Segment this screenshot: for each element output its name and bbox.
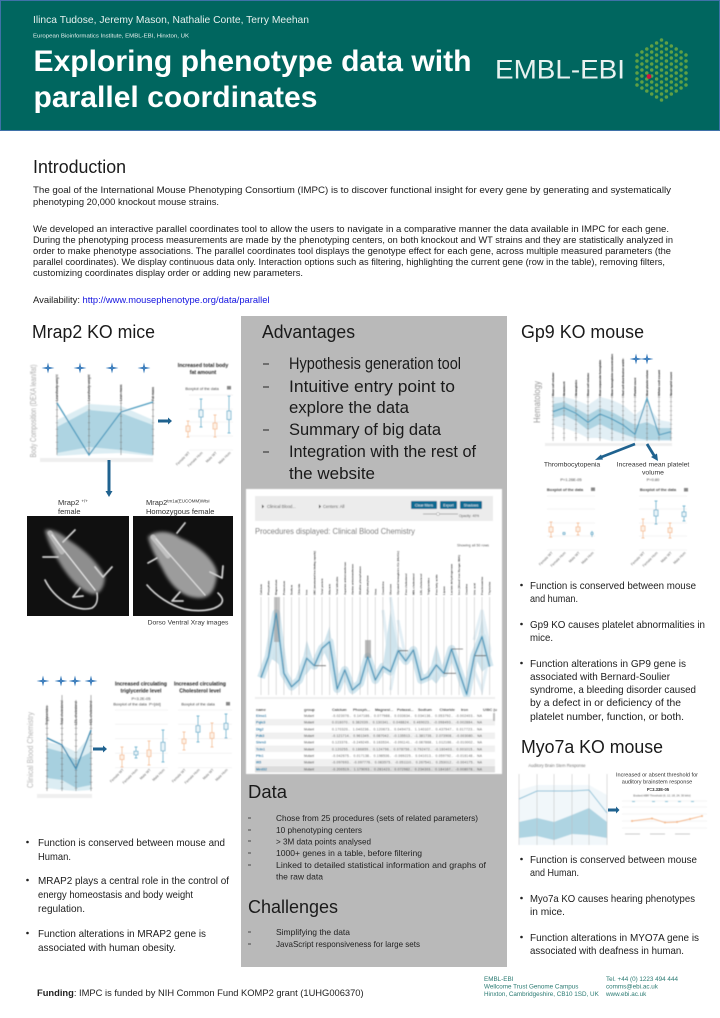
- data table: Pdk3: [256, 734, 264, 738]
- parallel coordinates plot: Aspartate aminotransferase: [343, 562, 347, 595]
- data table: Potassi...: [397, 708, 414, 712]
- contact: phone and web: [605, 976, 678, 998]
- text block: Myo7a findings: Function is conserved between mouse: [530, 854, 697, 866]
- data table: Shrn3: [256, 741, 266, 745]
- panel: advantages and data: [241, 316, 507, 967]
- boxplot: platelet count: Boxplot of the data: [547, 487, 584, 492]
- text block: tool description: We developed an interactive parallel coordinates tool to allow the users to navigate in a comparative manner the data available in IMPC for each gene.: [33, 224, 669, 234]
- contact: address: Hinxton, Cambridgeshire, CB10 1SD, UK: [484, 991, 600, 998]
- parallel coordinates plot: Thyroxine: [488, 581, 492, 595]
- heading: Mrap2: Mrap2 KO mice: [32, 322, 155, 342]
- text block: Mrap2 findings: regulation.: [38, 903, 85, 915]
- text block: Myo7a findings: Myo7a KO causes hearing phenotypes: [530, 893, 695, 905]
- title: [34, 45, 472, 114]
- boxplot: body fat: Male WT: [205, 450, 218, 464]
- title: parallel coordinates: [34, 81, 318, 114]
- text block: Gp9 findings: syndrome, a bleeding disorder caused: [530, 684, 696, 696]
- parallel coordinates plot: Magnesium: [274, 579, 278, 595]
- boxplot: platelet volume: Boxplot of the data: [640, 487, 677, 492]
- text block: goal: The goal of the International Mouse Phenotyping Consortium (IMPC) is to discover functional insight for every gene by generating and systematically: [33, 185, 672, 195]
- chart: body composition parallel coordinates: Body Composition (DEXA lean/fat): [29, 364, 38, 458]
- text block: Gp9 findings: [520, 580, 705, 723]
- parallel coordinates plot: Iron: [305, 589, 309, 595]
- parallel coordinates plot: Glucose: [388, 584, 392, 595]
- label: wild type mouse: [58, 498, 88, 516]
- authors: Ilinca Tudose, Jeremy Mason, Nathalie Conte, Terry Meehan: [33, 15, 309, 26]
- data table: Magnesi...: [375, 708, 393, 712]
- data table: Mutant: [304, 767, 314, 771]
- data table: Sodium: [418, 708, 433, 712]
- parallel coordinates plot: Creatinine: [381, 581, 385, 595]
- boxplot: cholesterol: Male WT: [202, 767, 215, 781]
- parallel coordinates plot: Creatine: [465, 583, 469, 595]
- chart: auditory brain stem response: Auditory Brain Stem Response: [528, 763, 586, 768]
- parallel coordinates plot: Total protein: [320, 578, 324, 595]
- data table: 0.170320.. 1.040236.. 0.120673.. 0.049473.. 1.140107.. 0.437947.. 0.017723.. NA: [332, 727, 483, 731]
- header banner: [0, 0, 720, 130]
- parallel coordinates plot: Lipase: [442, 586, 446, 595]
- boxplot: cholesterol: Female WT: [171, 767, 187, 784]
- boxplot: platelet volume: P=0.80: [647, 477, 660, 482]
- text block: goal: [33, 185, 672, 207]
- list: data: the raw data: [276, 872, 323, 882]
- boxplot: triglyceride: Female WT: [109, 767, 125, 784]
- contact: address: Wellcome Trust Genome Campus: [484, 984, 578, 990]
- heading: introduction: Introduction: [33, 157, 126, 177]
- text: threshold heading: P=3.33E-05: [647, 787, 670, 792]
- text block: Myo7a findings: in mice.: [530, 906, 565, 918]
- parallel coordinates plot: HDL-cholesterol: [411, 573, 415, 595]
- image: xray wild type: [27, 516, 129, 616]
- chart title: Procedures displayed: Clinical Blood Chemistry: [255, 527, 415, 536]
- label: knockout mouse: tm1a(EUCOMM)Wtsi: [167, 498, 210, 504]
- boxplot: body fat: [175, 363, 233, 468]
- chart: hematology parallel coordinates: [532, 354, 673, 446]
- caption: xray: Dorso Ventral Xray images: [148, 620, 229, 626]
- control bar: Opacity: 40%: [459, 514, 479, 518]
- arrow head: platelet volume: [651, 454, 658, 461]
- boxplot: triglyceride: Boxplot of the data P=[dd]: [113, 702, 161, 706]
- chart: clinical blood chemistry parallel coordinates: LDL-cholesterol: [74, 701, 78, 725]
- contact: phone and web: Tel. +44 (0) 1223 494 444: [606, 976, 678, 983]
- chart: body composition parallel coordinates: Fat mass: [151, 387, 155, 401]
- chart: clinical blood chemistry parallel coordinates: Clinical Blood Chemistry: [25, 711, 35, 788]
- list: data: > 3M data points analysed: [276, 836, 371, 846]
- label: increased mean platelet volume: [617, 462, 689, 476]
- parallel coordinates plot: UIBC (unsaturated iron binding capacity): [312, 551, 316, 595]
- data table: Mutant: [304, 734, 314, 738]
- control bar: [255, 496, 493, 521]
- introduction section: [33, 157, 673, 305]
- boxplot: body fat: fat amount: [190, 370, 217, 376]
- text block: Gp9 findings: associated with Bernard-Soulier: [530, 671, 670, 683]
- text block: Gp9 findings: Function alterations in GP9 gene is: [530, 658, 686, 670]
- parallel coordinates plot: Potassium: [282, 580, 286, 595]
- panel: Myo7a KO mouse: [519, 737, 707, 957]
- data table: 0.123376.. -0.249249.. 0.163534.. -0.091141.. -0.087868.. 1.012166.. -0.010002.. NA: [332, 741, 483, 745]
- data table: Dlg2: [256, 727, 264, 731]
- control bar: Clinical Blood...: [267, 504, 296, 509]
- arrow: to boxplot: [158, 418, 172, 424]
- boxplot: cholesterol: [171, 682, 232, 785]
- data table: Calcium: [332, 708, 347, 712]
- parallel coordinates plot: Iron (Blood iron Range: IBIA): [457, 555, 461, 595]
- data table: Mutant: [304, 741, 314, 745]
- data table: Mutant: [304, 727, 314, 731]
- text block: Mrap2 findings: Function alterations in MRAP2 gene is: [38, 928, 206, 940]
- chart: clinical blood chemistry parallel coordinates: Total cholesterol: [60, 700, 64, 725]
- arrow: to platelet volume: [647, 444, 655, 457]
- line chart: threshold: Evoked ABR Threshold (6, 12, 18, 24, 30 kHz): [633, 794, 691, 798]
- label: knockout mouse: [146, 498, 214, 516]
- data table: Pfn1: [256, 754, 264, 758]
- availability link: http://www.mousephenotype.org/data/parallel: [82, 295, 270, 305]
- data table: Chloride: [440, 708, 455, 712]
- contact: phone and web: www.ebi.ac.uk: [605, 991, 647, 998]
- text block: Gp9 findings: Gp9 KO causes platelet abnormalities in: [530, 619, 705, 631]
- boxplot: triglyceride: P=3.2E-05: [131, 696, 151, 701]
- chart: body composition parallel coordinates: [29, 364, 155, 462]
- data table: -0.200519.. 1.179093.. 0.281423.. 0.072982.. 0.234303.. 0.184167.. -0.008078.. NA: [332, 767, 483, 771]
- parallel coordinates plot: Glycated hemoglobin A1c (HbA1c): [396, 551, 400, 595]
- boxplot: platelet count: P=1.26E-05: [560, 477, 582, 482]
- boxplot: platelet volume: Female WT: [630, 550, 646, 567]
- chart: hematology parallel coordinates: Mean platelet volume: [645, 370, 649, 396]
- text block: tool description: parallel coordinates). We display continuous data only. Interaction options such as filtering, highlighting the current gene (row in the table), removing filters,: [33, 257, 665, 267]
- chart: clinical blood chemistry parallel coordinates: HDL-cholesterol: [89, 700, 93, 725]
- label: knockout mouse: Homozygous female: [146, 507, 214, 516]
- text block: goal: phenotyping 20,000 knockout mouse strains.: [33, 197, 219, 207]
- list: advantages: explore the data: [289, 399, 410, 417]
- data table: -0.121714.. 0.961349.. 0.087042.. -0.135513.. -1.381736.. 2.073908.. -0.003080.. NA: [332, 734, 483, 738]
- label: wild type mouse: female: [58, 507, 81, 516]
- list: data: [248, 813, 487, 882]
- data table: Tctn1: [256, 747, 265, 751]
- chart: hematology parallel coordinates: Platelet count: [633, 378, 637, 396]
- parallel coordinates plot: Fructosamine: [480, 576, 484, 595]
- icon: chemistry stars: [36, 676, 98, 686]
- parallel coordinates plot: Uric acid: [472, 583, 476, 595]
- text block: tool description: During the phenotyping process measurements are made by the phenotyping centers, on both knockout and WT strains and they are statistically analyzed in: [33, 235, 673, 245]
- list: data: Chose from 25 procedures (sets of related parameters): [276, 813, 478, 823]
- text block: Mrap2 findings: MRAP2 plays a central role in the control of: [38, 875, 229, 887]
- text: threshold heading: [616, 772, 698, 792]
- text block: Mrap2 findings: energy homeostasis and body weight: [38, 889, 193, 901]
- text block: Gp9 findings: mice.: [530, 632, 553, 644]
- label: thrombocytopenia: Thrombocytopenia: [544, 462, 600, 468]
- chart: auditory brain stem response: [519, 763, 607, 845]
- data table: name: [256, 708, 266, 712]
- data table: Mutant: [304, 714, 314, 718]
- data table: Iron: [461, 708, 469, 712]
- parallel coordinates plot: Total bilirubin: [335, 576, 339, 595]
- text block: tool description: [33, 224, 673, 278]
- boxplot: cholesterol: Female Hom: [184, 768, 201, 785]
- contact: address: EMBL-EBI: [484, 976, 514, 983]
- data table: Ift5: [256, 761, 261, 765]
- chart: hematology parallel coordinates: Mean cell volume: [551, 372, 555, 396]
- text block: Myo7a findings: Function alterations in MYO7A gene is: [530, 932, 699, 944]
- icon: significance stars: [42, 362, 150, 374]
- data table: Mutant: [304, 721, 314, 725]
- boxplot: cholesterol: Cholesterol level: [179, 688, 221, 694]
- parallel coordinates plot: Lactate dehydrogenase: [450, 563, 454, 595]
- logo: EMBL-EBI: EMBL-EBI: [495, 54, 625, 84]
- parallel coordinates plot: Calcium: [259, 584, 263, 595]
- boxplot: cholesterol: Male Hom: [215, 768, 229, 782]
- boxplot: body fat: Increased total body: [178, 363, 228, 369]
- chart: hematology parallel coordinates: Mean corpuscular hemoglobin: [598, 360, 602, 396]
- chart: hematology parallel coordinates: Hematology: [532, 381, 542, 423]
- list: advantages: Integration with the rest of: [289, 443, 476, 461]
- text block: Myo7a findings: [520, 854, 699, 957]
- data table: Mutant: [304, 754, 314, 758]
- line chart: threshold: [622, 794, 707, 834]
- chart: body composition parallel coordinates: Lean/body weight: [55, 374, 59, 401]
- parallel coordinates plot: Triglycerides: [427, 577, 431, 595]
- parallel coordinates plot: Urea: [373, 588, 377, 595]
- boxplot: body fat: Boxplot of the data: [185, 386, 219, 391]
- boxplot: cholesterol: Boxplot of the data: [181, 702, 215, 706]
- data table: -0.042675.. 0.017138.. 0.198536.. -0.069225.. 0.041013.. 0.059792.. -0.016148.. NA: [332, 754, 483, 758]
- list: challenges: [248, 927, 420, 949]
- chart: body composition parallel coordinates: Lean/body weight: [87, 374, 91, 401]
- boxplot: triglyceride: Female Hom: [122, 768, 139, 785]
- boxplot: platelet count: Female WT: [538, 550, 554, 567]
- funding note: Funding: IMPC is funded by NIH Common Fund KOMP2 grant (1UHG006370): [37, 988, 364, 998]
- text block: Myo7a findings: associated with deafness in human.: [530, 945, 684, 957]
- text block: tool description: order to make phenotype associations. The parallel coordinates tool displays the genotype effect for each gene, across multiple measured parameters (the: [33, 246, 671, 256]
- control bar: Centers: All: [323, 504, 344, 509]
- boxplot: platelet count: [538, 477, 595, 568]
- heading: Myo7a: Myo7a KO mouse: [521, 737, 663, 757]
- control bar: Shadows: [464, 504, 479, 508]
- chart: hematology parallel coordinates: Mean cell volume: [586, 372, 590, 396]
- heading: Gp9: Gp9 KO mouse: [521, 322, 644, 342]
- list: advantages: [263, 355, 476, 483]
- list: advantages: Intuitive entry point to: [289, 378, 455, 396]
- chart: clinical blood chemistry parallel coordinates: [25, 695, 93, 798]
- contact: address: [484, 976, 600, 998]
- data table: -0.023076.. 0.147186.. 0.077988.. 0.033634.. 0.034136.. 0.053792.. -0.002403.. NA: [332, 714, 483, 718]
- contact: phone and web: comms@ebi.ac.uk: [606, 984, 659, 990]
- parallel coordinates plot: Phosphate: [267, 580, 271, 595]
- data table: [255, 697, 498, 772]
- parallel coordinates plot: [259, 551, 492, 695]
- boxplot: triglyceride: triglyceride level: [121, 688, 162, 694]
- chart: hematology parallel coordinates: Hematocrit: [562, 381, 566, 396]
- boxplot: cholesterol: Increased circulating: [174, 682, 226, 688]
- list: challenges: Simplifying the data: [276, 927, 350, 937]
- arrow head: thrombocytopenia: [595, 454, 603, 460]
- list: advantages: Hypothesis generation tool: [289, 355, 461, 373]
- boxplot: triglyceride: Male WT: [139, 767, 152, 781]
- parallel coordinates plot: Free fatty acids: [434, 574, 438, 595]
- arrow: chemistry to boxplot: [93, 746, 107, 752]
- heading: challenges: Challenges: [248, 897, 338, 917]
- boxplot: platelet volume: Male Hom: [673, 551, 687, 565]
- data table: Med32: [256, 767, 267, 771]
- boxplot: platelet count: Male WT: [568, 550, 581, 564]
- parallel coordinates plot: Alpha-amylase: [366, 575, 370, 595]
- panel: Mrap2 KO mice: [25, 322, 233, 954]
- image: xray homozygous: [133, 516, 233, 616]
- list: data: 1000+ genes in a table, before filtering: [276, 848, 422, 858]
- data table: group: [304, 708, 315, 712]
- chart: clinical blood chemistry parallel coordinates: Triglycerides: [45, 706, 49, 725]
- boxplot: triglyceride: Male Hom: [152, 768, 166, 782]
- data table: -0.097693.. -0.097776.. 0.083575.. -0.051110.. 0.267541.. 0.253012.. -0.004175.. NA: [332, 761, 483, 765]
- list: data: 10 phenotyping centers: [276, 825, 362, 835]
- data table: Mutant: [304, 761, 314, 765]
- text block: tool description: customizing coordinates display order or adding new parameters.: [33, 268, 303, 278]
- arrow: to threshold chart: [608, 806, 620, 814]
- list: challenges: JavaScript responsiveness for large sets: [276, 939, 420, 949]
- list: advantages: Summary of big data: [289, 421, 442, 439]
- arrow: to thrombocytopenia: [599, 444, 635, 458]
- text block: Gp9 findings: Function is conserved between mouse: [530, 580, 696, 592]
- control bar: Clear filters: [415, 504, 433, 508]
- data table: 0.120255.. 0.186859.. 0.124796.. 0.078756.. 0.792472.. -0.160403.. 0.001015.. NA: [332, 747, 483, 751]
- data table: Mutant: [304, 747, 314, 751]
- label: wild type mouse: Mrap2: [58, 498, 79, 507]
- boxplot: platelet volume: [630, 477, 688, 568]
- label: increased mean platelet volume: volume: [642, 470, 664, 476]
- text block: Myo7a findings: and Human.: [530, 867, 579, 879]
- data table: Elmo1: [256, 714, 267, 718]
- icon: hematology stars: [630, 354, 654, 364]
- chart: hematology parallel coordinates: White cell count: [657, 370, 661, 396]
- boxplot: platelet count: Male Hom: [581, 551, 595, 565]
- boxplot: triglyceride: Increased circulating: [115, 682, 167, 688]
- screenshot: parallel coordinates tool: Showing all 50 rows: [457, 544, 489, 548]
- text: threshold heading: Increased or absent threshold for: [616, 772, 698, 778]
- heading: advantages: Advantages: [262, 322, 355, 342]
- boxplot: platelet volume: Female Hom: [642, 551, 659, 568]
- boxplot: body fat: Female WT: [175, 450, 191, 467]
- text block: Gp9 findings: and human.: [530, 593, 578, 605]
- panel: Gp9 KO mouse: [520, 322, 705, 723]
- boxplot: body fat: Male Hom: [218, 451, 232, 465]
- text block: Mrap2 findings: [26, 837, 229, 954]
- control bar: Export: [443, 504, 454, 508]
- boxplot: body fat: Female Hom: [187, 451, 204, 468]
- heading: data: Data: [248, 782, 288, 802]
- data table: Phosph...: [353, 708, 370, 712]
- label: wild type mouse: +/+: [81, 498, 88, 504]
- boxplot: triglyceride: [109, 682, 168, 785]
- parallel coordinates plot: Sodium: [290, 584, 294, 595]
- chart: hematology parallel coordinates: Neutrophil count: [669, 372, 673, 396]
- parallel coordinates plot: Alkaline phosphatase: [358, 566, 362, 595]
- data table: 0.016070.. 0.382039.. 0.130341.. 0.048824.. 0.469023.. -0.098493.. -0.002884.. NA: [332, 721, 483, 725]
- screenshot: parallel coordinates tool: [246, 489, 502, 774]
- label: knockout mouse: Mrap2: [146, 498, 167, 507]
- arrow: to xray: [106, 460, 112, 497]
- availability link: Availability:: [33, 295, 80, 305]
- affiliation: European Bioinformatics Institute, EMBL-EBI, Hinxton, UK: [33, 34, 189, 40]
- list: advantages: the website: [289, 465, 375, 483]
- parallel coordinates plot: Albumin: [328, 584, 332, 595]
- chart: hematology parallel coordinates: Hemoglobin: [574, 380, 578, 396]
- text block: Mrap2 findings: associated with human obesity.: [38, 942, 176, 954]
- boxplot: platelet volume: Male WT: [660, 550, 673, 564]
- text block: Mrap2 findings: Human.: [38, 851, 71, 863]
- text: threshold heading: auditory brainstem response: [622, 780, 692, 786]
- logo: EMBL-EBI: [495, 40, 686, 101]
- data table: Pqlc3: [256, 721, 265, 725]
- boxplot: platelet count: Female Hom: [550, 551, 567, 568]
- list: data: Linked to detailed statistical information and graphs of: [276, 860, 487, 870]
- parallel coordinates plot: Chloride: [297, 583, 301, 595]
- text block: Gp9 findings: by a defect in or deficiency of the: [530, 697, 681, 709]
- chart: body composition parallel coordinates: Lean mass: [119, 384, 123, 401]
- data table: UIBC (u: [483, 708, 498, 712]
- text block: Gp9 findings: platelet number, function, or both.: [530, 711, 684, 723]
- parallel coordinates plot: LDL-cholesterol: [419, 573, 423, 595]
- title: Exploring phenotype data with: [34, 45, 472, 78]
- text block: Mrap2 findings: Function is conserved between mouse and: [38, 837, 225, 849]
- chart: hematology parallel coordinates: Red cell distribution width: [621, 359, 625, 396]
- chart: hematology parallel coordinates: Mean hemoglobin concentration: [610, 354, 614, 396]
- parallel coordinates plot: Alanine aminotransferase: [350, 564, 354, 595]
- parallel coordinates plot: Free cholesterol: [404, 573, 408, 595]
- label: increased mean platelet volume: Increased mean platelet: [617, 462, 689, 468]
